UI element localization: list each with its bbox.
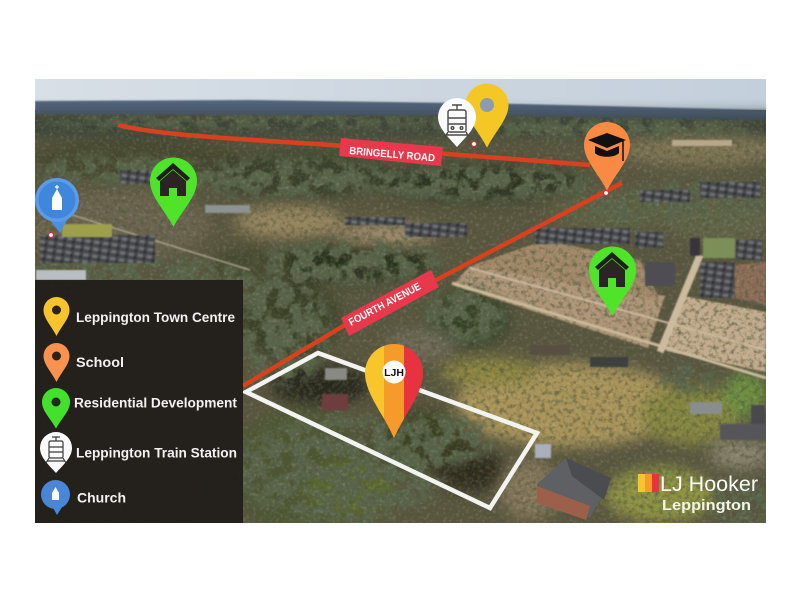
- building: large grey roof house: [537, 458, 611, 520]
- property boundary: [246, 353, 537, 508]
- legend: Church: [41, 480, 126, 515]
- roads and housing details: [36, 140, 766, 458]
- aerial photo background: [20, 79, 790, 530]
- light speckle texture: [35, 114, 766, 523]
- road line: Fourth Avenue: [243, 183, 622, 386]
- distant hills: [35, 100, 766, 120]
- logo: LJ Hooker Leppington: [638, 473, 758, 514]
- pin: Leppington Town Centre: [466, 84, 508, 148]
- pin: residential development right: [589, 246, 636, 316]
- logo: LJ Hooker Leppington: Leppington: [662, 497, 751, 514]
- pin: residential development left: [150, 158, 197, 227]
- dark speckle texture: [35, 114, 766, 523]
- pin: LJH property: [365, 344, 424, 440]
- legend: Leppington Town Centre: [44, 297, 235, 336]
- tree clump texture: [35, 110, 766, 523]
- legend: Church: Church: [77, 490, 126, 506]
- legend panel: [35, 280, 243, 523]
- pin: church: [35, 178, 79, 233]
- pin: school: [584, 122, 630, 191]
- road label: Fourth Avenue: FOURTH AVENUE: [347, 280, 423, 329]
- road line: Bringelly Road: [118, 125, 590, 165]
- pin: Leppington Train Station: [438, 98, 476, 147]
- legend: Leppington Train Station: Leppington Train Station: [76, 446, 237, 460]
- logo: LJ Hooker Leppington: LJ Hooker: [660, 473, 758, 496]
- legend: Residential Development: Residential Development: [74, 396, 238, 410]
- map marker dots: [48, 142, 608, 238]
- legend: Leppington Town Centre: Leppington Town Centre: [76, 310, 235, 325]
- road label: Bringelly Road: [339, 138, 443, 166]
- dirt lots: [452, 240, 766, 372]
- aerial location map infographic: [35, 79, 766, 523]
- road label: Bringelly Road: BRINGELLY ROAD: [349, 145, 436, 165]
- ground terrain: [20, 110, 790, 530]
- road label: Fourth Avenue: [341, 270, 439, 336]
- sky: [35, 79, 766, 111]
- legend: School: School: [76, 355, 124, 370]
- pin: LJH property: LJH: [384, 367, 404, 379]
- legend: Residential Development: [42, 388, 238, 429]
- legend: Leppington Train Station: [40, 432, 237, 473]
- legend: School: [44, 343, 124, 382]
